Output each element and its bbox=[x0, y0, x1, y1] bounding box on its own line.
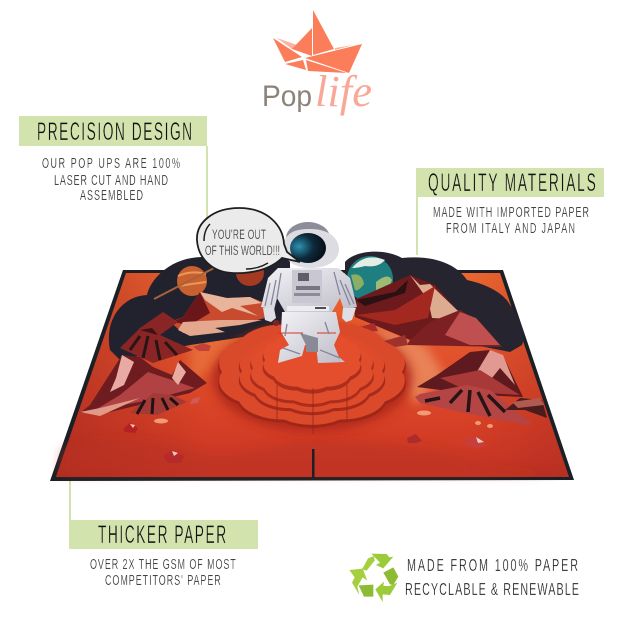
recycling statement: RECYCLABLE & RENEWABLE bbox=[405, 580, 579, 600]
planet: mars bbox=[236, 260, 264, 286]
description: OVER 2X THE GSM OF MOST bbox=[90, 556, 236, 573]
pop-up card illustration bbox=[50, 208, 574, 481]
wordmark: Pop: Pop bbox=[262, 80, 312, 113]
description: MADE WITH IMPORTED PAPER bbox=[433, 204, 589, 221]
rocks bbox=[123, 323, 493, 463]
description: ASSEMBLED bbox=[80, 187, 143, 204]
speech text: YOU'RE OUT bbox=[212, 228, 266, 243]
callout: thicker paper bbox=[69, 520, 258, 589]
description: OUR POP UPS ARE 100% bbox=[42, 155, 180, 172]
recycling statement: MADE FROM 100% PAPER bbox=[407, 556, 578, 576]
planet: ringed saturn bbox=[154, 266, 216, 299]
callout: quality materials bbox=[416, 168, 604, 237]
speech text: OF THIS WORLD!!! bbox=[205, 244, 280, 259]
mountains: right volcano bbox=[415, 385, 547, 425]
mountains: left volcano bbox=[120, 312, 211, 363]
description: COMPETITORS' PAPER bbox=[105, 572, 221, 589]
mountains: back left bbox=[170, 292, 272, 336]
description bbox=[42, 155, 180, 204]
mountains: small left volcano bbox=[130, 393, 200, 415]
mountains: front right bbox=[417, 350, 523, 397]
card base bbox=[50, 270, 574, 481]
speech text bbox=[205, 228, 280, 259]
description: FROM ITALY AND JAPAN bbox=[446, 220, 575, 237]
callout: precision design bbox=[19, 116, 207, 204]
torso and arms bbox=[261, 268, 357, 322]
stepped centre platform bbox=[212, 319, 412, 434]
mountains: middle right bbox=[384, 310, 502, 347]
planet: earth bbox=[347, 256, 393, 302]
icon: recycling symbol bbox=[349, 554, 398, 602]
heading band bbox=[416, 168, 604, 197]
recycling statement bbox=[405, 556, 579, 600]
mountains: front left bbox=[80, 355, 207, 416]
night sky hills bbox=[109, 252, 524, 360]
mountains: back right bbox=[354, 275, 470, 340]
left hills bbox=[109, 257, 290, 360]
speech bubble bbox=[197, 208, 300, 273]
legs and boots bbox=[273, 312, 345, 363]
description bbox=[433, 204, 589, 237]
connector lines bbox=[69, 146, 418, 520]
helmet bbox=[283, 222, 339, 268]
heading: THICKER PAPER bbox=[98, 522, 226, 549]
wordmark: life: life bbox=[315, 67, 372, 116]
heading: QUALITY MATERIALS bbox=[428, 170, 596, 197]
right hills bbox=[345, 252, 524, 352]
heading band bbox=[19, 116, 207, 146]
astronaut bbox=[261, 222, 357, 363]
logo: Poplife bbox=[262, 10, 372, 116]
icon: origami paper boat bbox=[273, 10, 362, 73]
ground shading bbox=[60, 322, 560, 474]
heading: PRECISION DESIGN bbox=[37, 119, 192, 146]
heading band bbox=[69, 520, 258, 549]
description: LASER CUT AND HAND bbox=[54, 172, 168, 189]
description bbox=[90, 556, 236, 589]
centre fold slit bbox=[312, 449, 314, 478]
